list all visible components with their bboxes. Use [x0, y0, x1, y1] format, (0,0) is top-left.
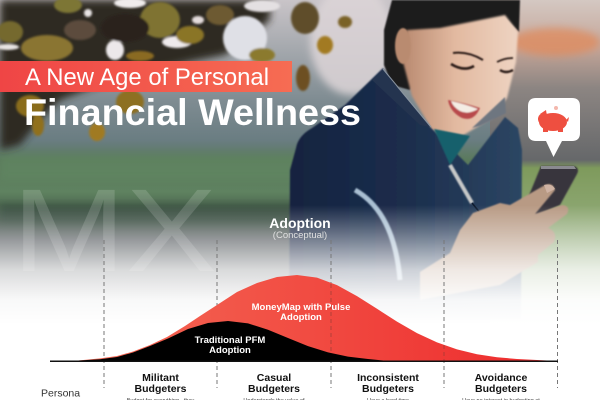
collar lining: [472, 97, 506, 128]
title band: [0, 61, 292, 92]
chart heading: [269, 215, 331, 241]
baseline axis: [50, 360, 558, 362]
Traditional PFM adoption curve: [70, 321, 388, 361]
curve label: Traditional PFM line 2: Adoption: [209, 345, 251, 356]
curve label: Traditional PFM: Traditional PFM: [195, 335, 265, 346]
photo: woman with phone: [289, 0, 578, 320]
neck and face: [403, 15, 518, 136]
ear: [395, 28, 411, 64]
persona: Inconsistent Budgeters: [357, 372, 419, 400]
persona: Militant Budgeters: [127, 372, 195, 400]
jacket: [289, 68, 522, 320]
row label: Persona: Persona: [41, 388, 80, 400]
icon: piggy bank: [538, 106, 569, 132]
eyes and brows: [451, 53, 513, 72]
smile: [448, 100, 480, 119]
teal shirt: [434, 129, 470, 165]
persona: Inconsistent Budgeters: Budgeters: [362, 383, 414, 395]
title line 2: Financial Wellness: [24, 92, 361, 133]
persona: Avoidance Budgeters: Budgeters: [475, 383, 527, 395]
white fade: [0, 205, 600, 325]
persona: Casual Budgeters: Budgeters: [248, 383, 300, 395]
curve label: MoneyMap: MoneyMap with Pulse: [252, 302, 350, 313]
MX watermark: MX: [12, 165, 217, 297]
chart heading: Adoption: [269, 215, 331, 231]
chart heading: (Conceptual): [273, 230, 327, 241]
MoneyMap with Pulse adoption curve: [60, 275, 557, 361]
jacket collar shading: [372, 70, 430, 127]
speech bubble with piggy bank icon: [528, 98, 580, 157]
curve label: MoneyMap line 2: Adoption: [280, 312, 322, 323]
phone: [518, 166, 578, 222]
persona: Avoidance Budgeters: [462, 372, 540, 400]
chart: adoption curves: [50, 275, 558, 362]
dashed guide lines: [104, 240, 558, 388]
zipper: [450, 165, 472, 203]
pocket trim: [355, 190, 400, 280]
persona: Avoidance Budgeters: Avoidance: [475, 372, 528, 384]
photo: autumn tree foliage: [0, 0, 352, 150]
persona: Inconsistent Budgeters: Inconsistent: [357, 372, 419, 384]
title line 1: A New Age of Personal: [25, 64, 269, 91]
persona: Militant Budgeters: Militant: [142, 372, 179, 384]
persona: Casual Budgeters: [243, 372, 305, 400]
hand: [420, 184, 568, 300]
hair: [384, 0, 520, 90]
dashed overlays on curve: [331, 284, 444, 361]
persona: Casual Budgeters: Casual: [257, 372, 291, 384]
persona: Militant Budgeters: Budgeters: [135, 383, 187, 395]
